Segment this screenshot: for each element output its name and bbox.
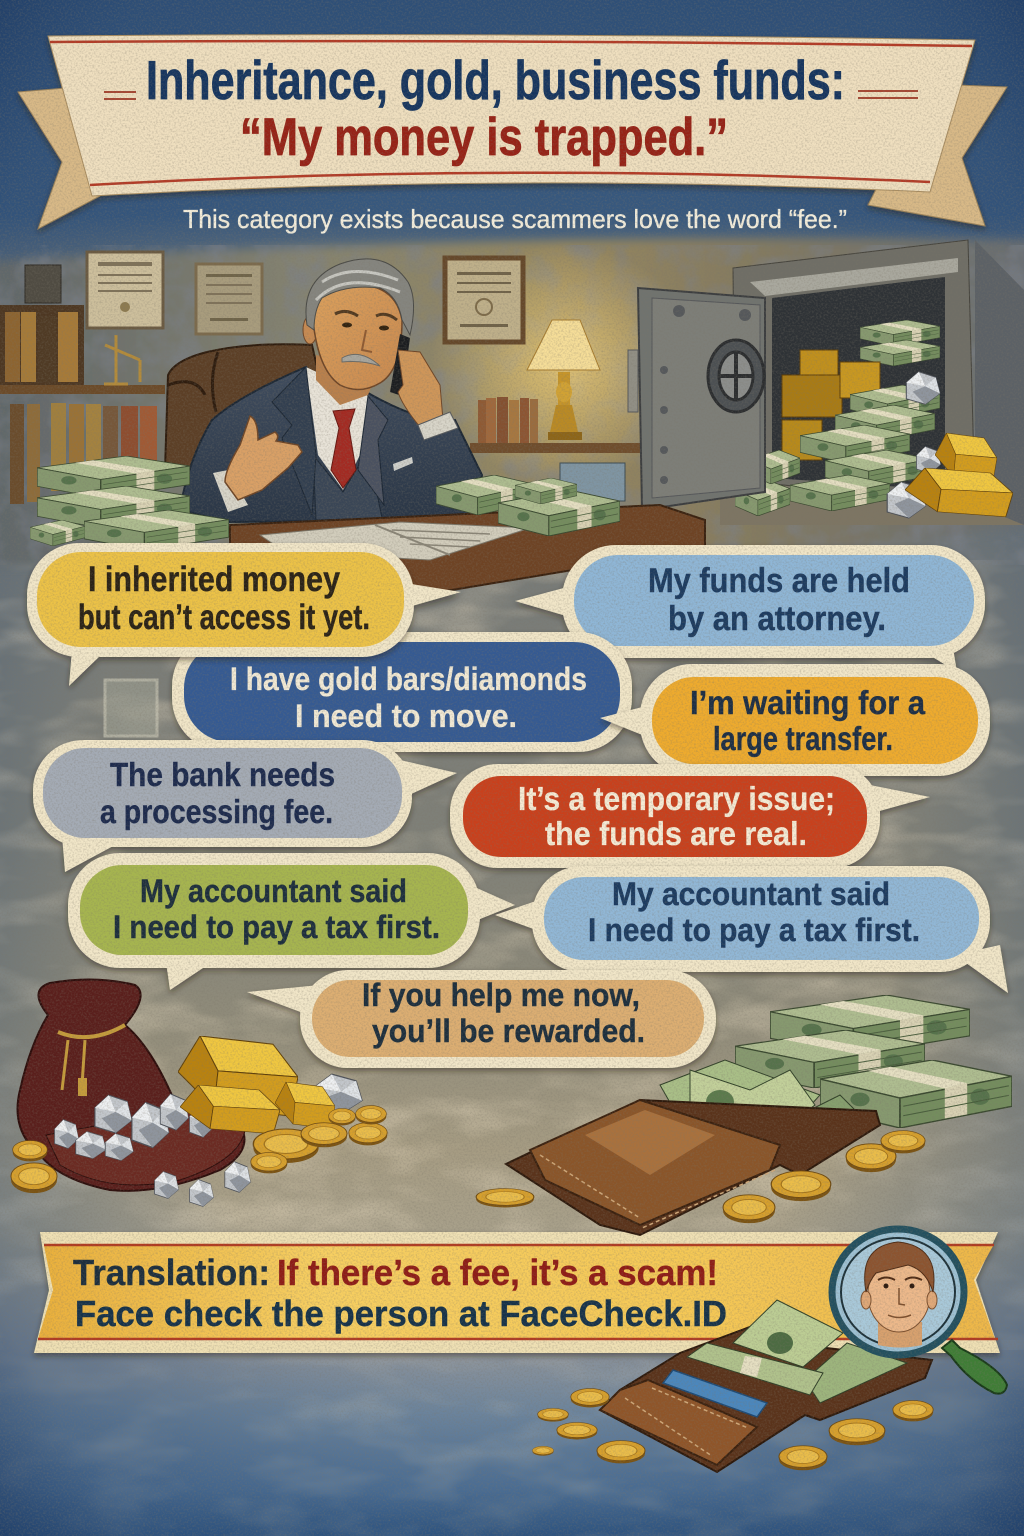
subtitle: This category exists because scammers love the word “fee.”: [183, 204, 847, 234]
title line two: “My money is trapped.”: [240, 108, 728, 167]
face: [313, 285, 402, 390]
face in lens: [878, 1322, 922, 1348]
bubble: you will be rewarded: [247, 970, 716, 1068]
vault room: [720, 240, 1024, 525]
table lamp: [527, 320, 600, 440]
side shelf with books: [470, 397, 642, 453]
translation footer banner: [34, 1232, 1000, 1353]
faint framed stamp on floor: [105, 680, 157, 736]
bubble: temporary issue: the funds are real.: [545, 815, 807, 852]
bubble: temporary issue: It’s a temporary issue;: [518, 780, 835, 817]
framed certificates: [87, 252, 523, 342]
bubble: temporary issue: [450, 764, 930, 868]
banknotes: [660, 1060, 820, 1150]
bubble: accountant green: My accountant said: [140, 873, 407, 909]
eyes and brows: [335, 311, 397, 320]
bubble: accountant blue: [495, 866, 1008, 993]
bubble: accountant blue: I need to pay a tax first.: [588, 912, 920, 948]
bubble: gold bars and diamonds: I need to move.: [295, 698, 517, 734]
money stacks and brown wallet: [476, 995, 1012, 1235]
gesturing hand: [225, 416, 302, 500]
bubble: gold bars and diamonds: [172, 632, 632, 752]
pocket square: [393, 457, 413, 471]
translation footer banner: If there’s a fee, it’s a scam!: [277, 1252, 718, 1293]
ear: [303, 316, 317, 344]
desk money stacks: [436, 463, 625, 536]
desk with papers: [230, 505, 705, 592]
gold coins: [13, 1141, 47, 1161]
footer line one: Translation:: [73, 1252, 270, 1293]
bubble: held by an attorney: My funds are held: [648, 562, 910, 600]
wallet back: [600, 1327, 932, 1472]
bubble: held by an attorney: [515, 545, 985, 672]
tie: [331, 409, 356, 488]
scales on shelf: [104, 335, 140, 384]
suit: [180, 367, 482, 522]
gold bars: [178, 1036, 298, 1116]
lens rim: [832, 1229, 964, 1355]
vault door: [628, 288, 765, 510]
bubble: accountant blue: My accountant said: [612, 876, 890, 912]
raised hand on phone: [398, 350, 443, 427]
top title banner: [18, 35, 1007, 229]
bills: [733, 1300, 843, 1367]
moustache: [342, 354, 380, 366]
left ribbon tail: [18, 86, 100, 229]
shirt cuff of gesturing arm: [213, 470, 248, 512]
neck: [316, 355, 378, 405]
footer line two: Face check the person at FaceCheck.ID: [75, 1293, 727, 1334]
bubble: large transfer: large transfer.: [713, 720, 893, 757]
man on the phone: [180, 259, 482, 522]
bubble: accountant green: [68, 853, 515, 990]
bubble: inherited money: but can’t access it yet.: [78, 598, 370, 637]
velvet pouch: [18, 979, 244, 1191]
bubble: accountant green: I need to pay a tax first.: [113, 909, 440, 945]
blue card: [663, 1370, 767, 1417]
hair: [306, 259, 414, 335]
magnifying glass with face: [832, 1229, 1007, 1394]
title line one: Inheritance, gold, business funds:: [146, 49, 845, 111]
lapels: [272, 367, 316, 515]
bubble: held by an attorney: by an attorney.: [668, 600, 886, 638]
bubble: processing fee: The bank needs: [110, 756, 335, 793]
bubble: gold bars and diamonds: I have gold bars/diamonds: [230, 661, 587, 697]
cash and gold in vault: [735, 320, 1013, 518]
pouch of diamonds and gold: [11, 979, 387, 1206]
bubble: you will be rewarded: If you help me now,: [362, 977, 640, 1013]
handle: [942, 1340, 1007, 1394]
bubble: large transfer: I’m waiting for a: [690, 684, 926, 721]
bubble: large transfer: [600, 664, 990, 776]
banner body: [48, 35, 975, 196]
coins: [771, 1171, 831, 1201]
left money stacks: [30, 456, 229, 550]
office scene illustration: [0, 238, 1024, 592]
bubble: processing fee: [33, 740, 457, 872]
pouch opening: [46, 1105, 245, 1185]
right ribbon tail: [868, 84, 1007, 226]
shirt: [306, 367, 372, 490]
bubble: you will be rewarded: you’ll be rewarded.: [372, 1013, 645, 1049]
vest: [313, 450, 382, 520]
phone: [390, 334, 410, 396]
diamonds: [54, 1120, 78, 1148]
wristwatch and cuff: [418, 412, 458, 440]
leather chair: [165, 344, 320, 470]
bookshelf: [0, 265, 165, 504]
office wall: [0, 238, 1024, 565]
bubble: inherited money: I inherited money: [88, 560, 340, 599]
wallet: [506, 1100, 880, 1235]
bubble: inherited money: [27, 543, 461, 686]
bubble: processing fee: a processing fee.: [100, 793, 333, 830]
lower wallet with cash and coins: [532, 1300, 933, 1472]
wallet front: [600, 1380, 757, 1465]
